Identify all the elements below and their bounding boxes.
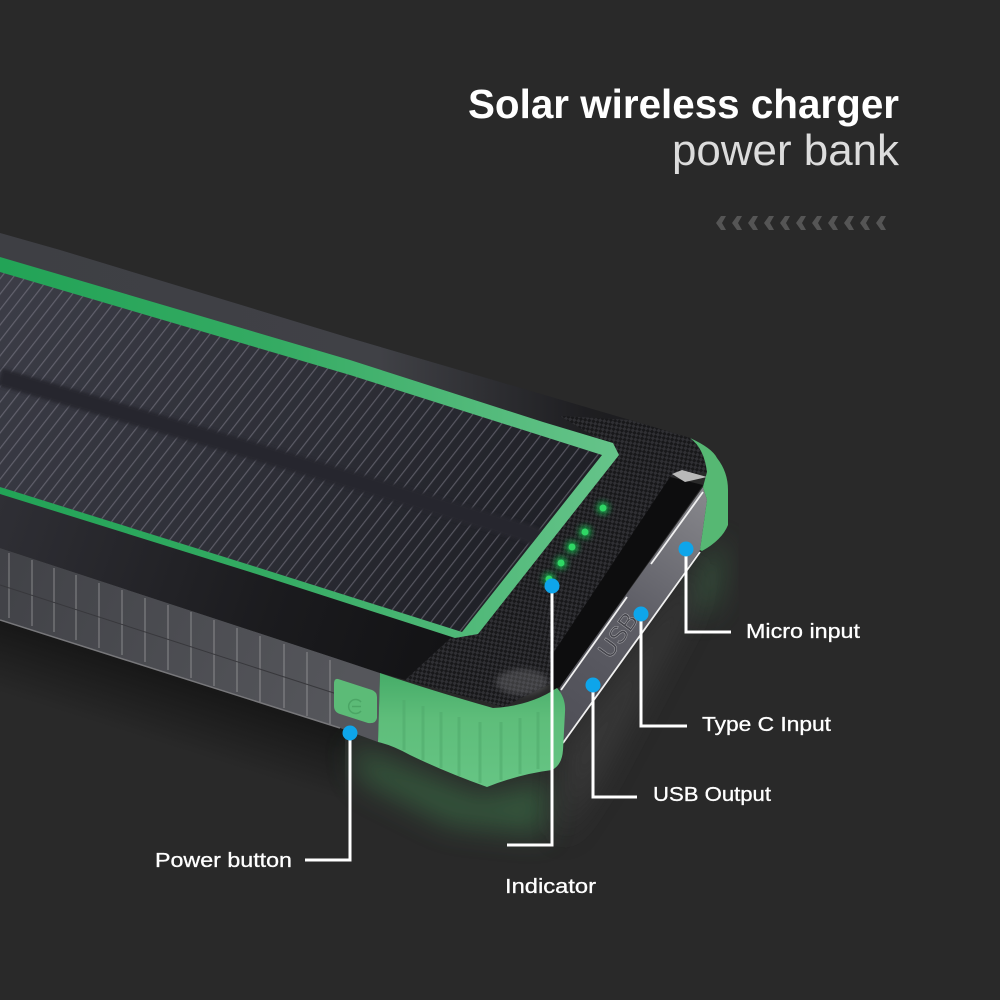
- callout: USB Output: USB Output: [653, 783, 771, 806]
- infographic canvas: [0, 88, 899, 894]
- title: power bank: [672, 126, 900, 175]
- callout: Power button: [155, 726, 358, 872]
- metal side plate: [558, 487, 707, 743]
- recess above side plate: [552, 477, 703, 690]
- shell upper rim: [0, 233, 700, 460]
- indicator LEDs: [542, 502, 610, 586]
- grip ridges on bottom corner: [404, 700, 538, 783]
- side strip with grip ribs: [0, 548, 380, 742]
- title: [468, 81, 900, 175]
- silver corner glint: [672, 470, 707, 482]
- callout: Indicator: [505, 578, 596, 898]
- carbon fibre section right: [405, 416, 707, 707]
- floor reflections under the device: [0, 540, 724, 840]
- power bank device: [0, 233, 728, 787]
- green corner top right: [690, 438, 728, 551]
- top shell: [0, 233, 707, 707]
- solar frame: [0, 257, 619, 638]
- callout: Power button: Power button: [155, 849, 292, 872]
- solar panel: [0, 272, 602, 632]
- power button: [334, 679, 377, 723]
- USB embossed marks: USB: [593, 608, 644, 664]
- solar cell dividers: [0, 377, 560, 548]
- callout: Type C Input: [634, 606, 831, 736]
- callout: Type C Input: Type C Input: [702, 713, 831, 736]
- carbon highlight near corner: [496, 669, 548, 695]
- callout: Micro input: [678, 542, 860, 643]
- chevron row decoration: [716, 216, 886, 230]
- green corner bottom: [378, 673, 565, 787]
- callout: Micro input: Micro input: [746, 620, 860, 643]
- callout: USB Output: [586, 678, 771, 806]
- plate white edges: [561, 492, 703, 743]
- title: Solar wireless charger: [468, 81, 899, 127]
- callout: Indicator: Indicator: [505, 875, 596, 898]
